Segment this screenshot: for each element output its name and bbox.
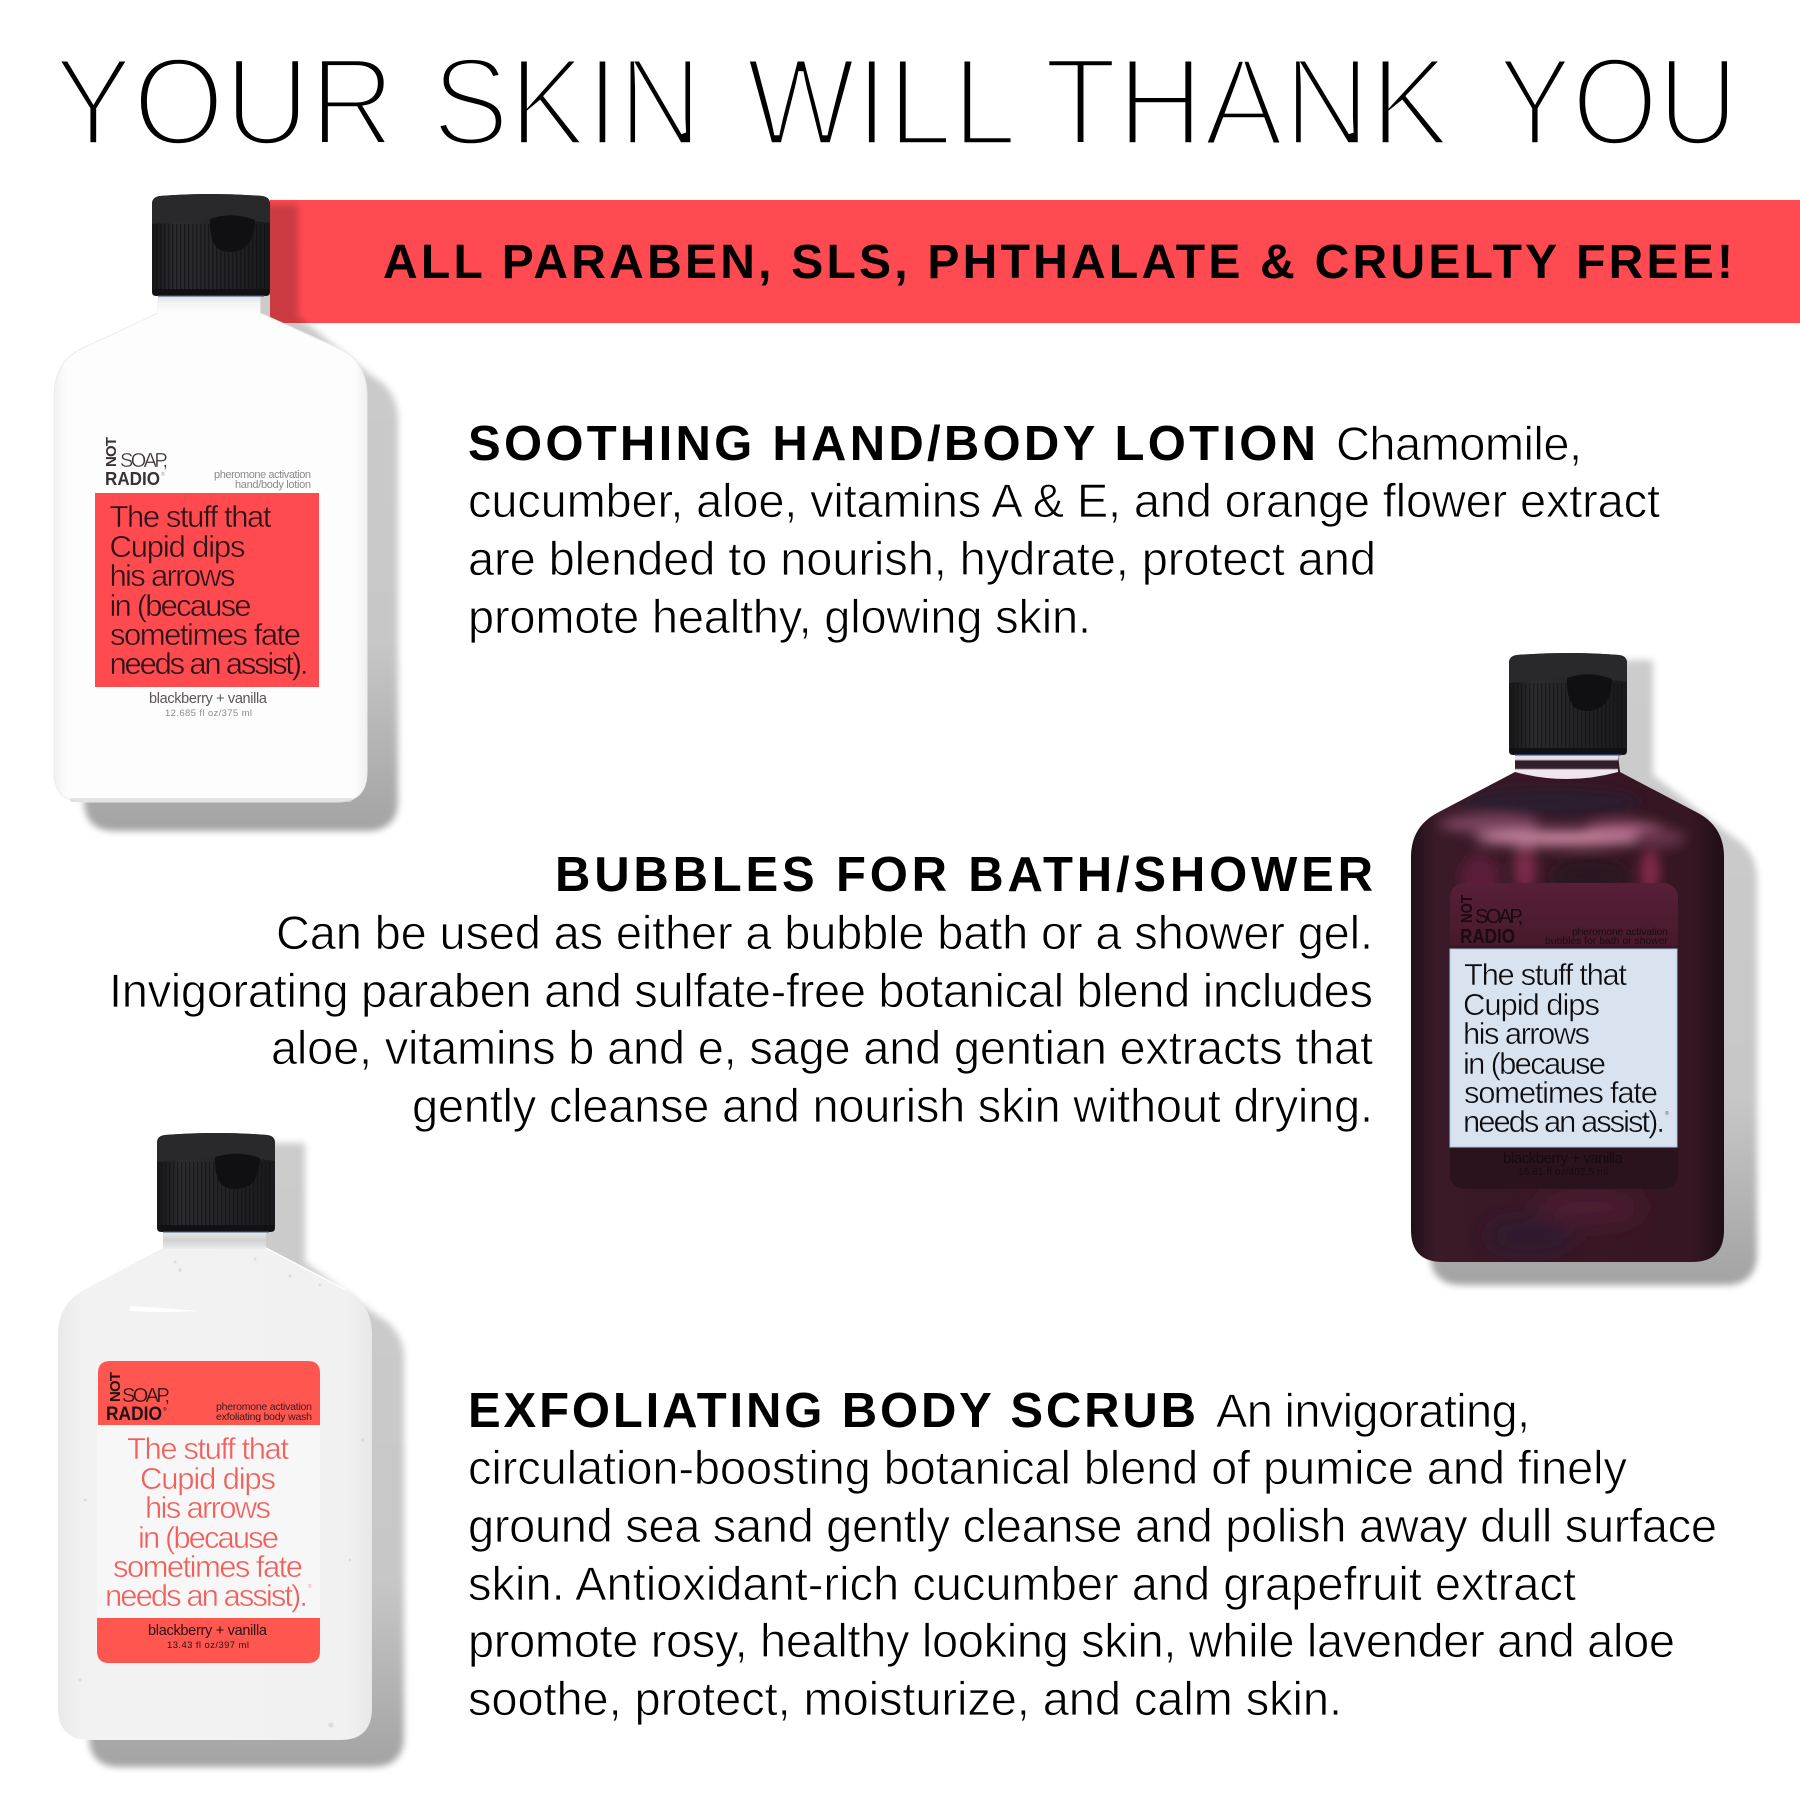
title [54, 33, 1738, 172]
logo: RADIO [105, 468, 160, 489]
scent and size: 13.43 fl oz/397 ml [167, 1640, 249, 1651]
scent and size [1503, 1150, 1624, 1178]
slogan: sometimes fate [1464, 1075, 1658, 1110]
logo: RADIO [106, 1404, 162, 1425]
scent and size: blackberry + vanilla [1503, 1150, 1624, 1167]
slogan: in (because [110, 588, 252, 623]
scrub body text: promote rosy, healthy looking skin, while lavender and aloe [468, 1614, 1675, 1667]
slogan: needs an assist). [105, 1578, 308, 1613]
logo [1459, 895, 1523, 948]
logo [106, 1372, 170, 1425]
product type: pheromone activation [216, 1401, 312, 1413]
slogan: ® [1665, 1110, 1669, 1117]
scrub body text: skin. Antioxidant-rich cucumber and grapefruit extract [468, 1557, 1576, 1610]
lotion body text: are blended to nourish, hydrate, protect and [468, 532, 1376, 585]
slogan: Cupid dips [110, 529, 246, 564]
banner text: ALL PARABEN, SLS, PHTHALATE & CRUELTY FREE! [383, 236, 1733, 289]
slogan: ® [308, 1583, 312, 1590]
slogan: The stuff that [127, 1431, 289, 1466]
bubbles body text: Invigorating paraben and sulfate-free botanical blend includes [109, 964, 1373, 1017]
label [95, 437, 319, 719]
scrub body text: soothe, protect, moisturize, and calm skin. [468, 1672, 1342, 1725]
logo: ® [161, 471, 165, 478]
logo: NOT [107, 1372, 124, 1402]
product type: pheromone activation [214, 469, 311, 481]
scrub body text: An invigorating, [1216, 1384, 1530, 1437]
slogan: in (because [138, 1520, 279, 1555]
logo: RADIO [1460, 926, 1515, 948]
bubbles description [109, 848, 1373, 1132]
lotion heading: SOOTHING HAND/BODY LOTION [468, 417, 1316, 471]
product type: pheromone activation [1572, 926, 1668, 938]
product: bubbles bottle [1411, 653, 1757, 1285]
product type: exfoliating body wash [216, 1411, 312, 1423]
scent and size [149, 691, 268, 719]
label [1450, 883, 1678, 1189]
lotion body text: Chamomile, [1336, 417, 1582, 470]
slogan: needs an assist). [110, 646, 308, 681]
slogan: The stuff that [1464, 957, 1627, 992]
lotion body text: promote healthy, glowing skin. [468, 590, 1091, 643]
product type [216, 1401, 312, 1423]
slogan [105, 1431, 312, 1613]
scrub heading: EXFOLIATING BODY SCRUB [468, 1384, 1196, 1438]
title: YOU [1498, 33, 1738, 172]
bubbles body text: Can be used as either a bubble bath or a shower gel. [276, 906, 1373, 959]
bubbles body text: gently cleanse and nourish skin without drying. [412, 1079, 1373, 1132]
title: WILL [746, 33, 1017, 172]
scrub body text: circulation-boosting botanical blend of pumice and finely [468, 1441, 1628, 1494]
slogan: his arrows [145, 1490, 271, 1525]
lotion description [468, 417, 1660, 643]
logo: SOAP, [1475, 906, 1523, 928]
scent and size: 16.81 fl oz/402.5 ml [1518, 1167, 1608, 1178]
slogan: sometimes fate [113, 1549, 303, 1584]
logo: SOAP, [120, 450, 168, 472]
slogan: The stuff that [110, 499, 272, 534]
slogan [1463, 957, 1669, 1139]
product: hand/body lotion bottle [54, 194, 398, 831]
scrub body text: ground sea sand gently cleanse and polish away dull surface [468, 1499, 1717, 1552]
slogan: Cupid dips [140, 1461, 276, 1496]
slogan: his arrows [1463, 1016, 1590, 1051]
slogan: sometimes fate [110, 617, 301, 652]
scent and size: blackberry + vanilla [149, 691, 268, 707]
product type [214, 469, 311, 491]
label [97, 1361, 320, 1663]
lotion body text [468, 417, 1660, 643]
logo: ® [163, 1406, 167, 1413]
scrub body text [468, 1384, 1717, 1725]
slogan: needs an assist). [1463, 1104, 1665, 1139]
logo: NOT [103, 437, 120, 467]
logo: NOT [1459, 895, 1476, 923]
product type: hand/body lotion [235, 479, 311, 491]
slogan [110, 499, 312, 681]
bubbles body text: aloe, vitamins b and e, sage and gentian extracts that [271, 1021, 1373, 1074]
bubbles heading: BUBBLES FOR BATH/SHOWER [555, 848, 1373, 902]
slogan: Cupid dips [1463, 987, 1600, 1022]
title: THANK [1044, 33, 1450, 172]
logo: SOAP, [122, 1385, 170, 1407]
banner [270, 200, 1800, 323]
slogan: his arrows [110, 558, 236, 593]
product type: bubbles for bath or shower [1545, 935, 1668, 947]
slogan: ® [308, 651, 312, 658]
title: YOUR [54, 33, 395, 172]
product type [1545, 926, 1668, 947]
scent and size: blackberry + vanilla [148, 1623, 268, 1639]
scent and size [148, 1623, 268, 1651]
logo [103, 437, 168, 489]
product: body scrub bottle [58, 1133, 404, 1767]
scrub description [468, 1384, 1717, 1725]
scrub speckles [78, 1258, 365, 1728]
lotion body text: cucumber, aloe, vitamins A & E, and orange flower extract [468, 474, 1660, 527]
title: SKIN [432, 33, 702, 172]
bubbles body text [109, 906, 1373, 1132]
scent and size: 12.685 fl oz/375 ml [165, 708, 252, 719]
slogan: in (because [1463, 1046, 1606, 1081]
